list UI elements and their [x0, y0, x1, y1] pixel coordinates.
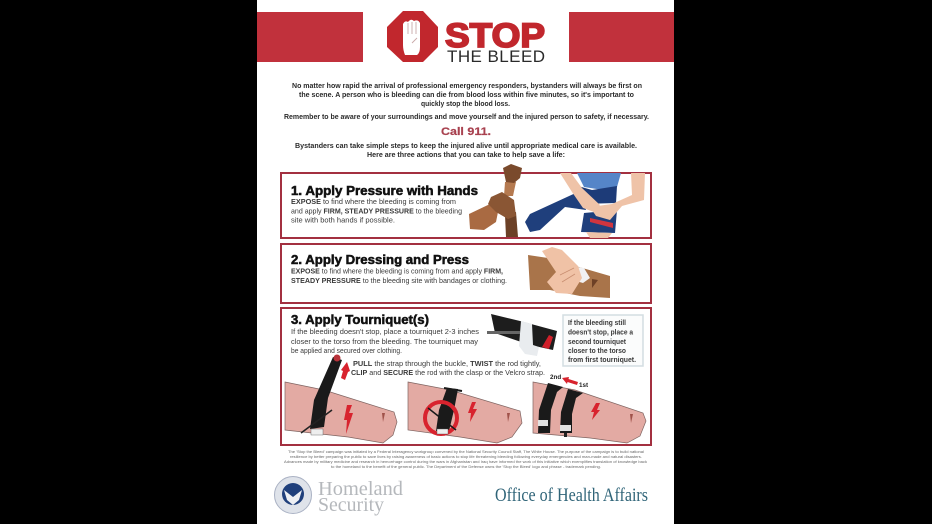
panel 3 intro text: [291, 327, 479, 355]
heading 1: 1. Apply Pressure with Hands: [291, 183, 478, 198]
callout: second tourniquet: second tourniquet: [568, 337, 627, 346]
panel 3 intro text: closer to the torso from the bleeding. The tourniquet may: [291, 337, 478, 346]
panel 1 body text: and apply FIRM, STEADY PRESSURE to the bleeding: [291, 206, 462, 216]
callout: second tourniquet: doesn't stop, place a: [568, 328, 634, 336]
homeland security logo: [274, 476, 403, 516]
wordmark: Homeland Security: Homeland: [318, 478, 403, 500]
callout: second tourniquet: [563, 315, 643, 366]
panel 1 body text: site with both hands if possible.: [291, 216, 395, 224]
panel 3 intro text: be applied and secured over clothing.: [291, 346, 402, 355]
instruction text: CLIP and SECURE the rod with the clasp or the Velcro strap.: [351, 368, 545, 377]
heading 2: 2. Apply Dressing and Press: [291, 252, 469, 267]
logo word STOP: STOP: [445, 17, 545, 55]
arrow: pull up: [341, 362, 350, 380]
logo: Stop the Bleed: [387, 11, 545, 66]
intro paragraph: [292, 81, 642, 108]
disclaimer text: [284, 450, 647, 469]
labels: 2nd and 1st with arrow: 2nd: [550, 374, 561, 381]
call 911: Call 911.: [441, 126, 491, 138]
bystander text: Here are three actions that you can take to help save a life:: [367, 150, 565, 159]
panel 1 body text: EXPOSE to find where the bleeding is coming from: [291, 197, 456, 206]
panel 3: apply tourniquet: [281, 308, 651, 445]
labels: 2nd and 1st with arrow: [550, 374, 589, 389]
white poster page: [257, 0, 674, 524]
panel 3 border: [281, 308, 651, 445]
intro paragraph: No matter how rapid the arrival of professional emergency responders, bystanders will always be first on: [292, 81, 642, 90]
callout: second tourniquet: If the bleeding still: [568, 318, 626, 327]
wordmark: Homeland Security: [318, 478, 403, 516]
office of health affairs: Office of Health Affairs: [495, 485, 648, 506]
panel 2: apply dressing: [281, 244, 651, 303]
callout: second tourniquet: closer to the torso: [568, 346, 627, 355]
panel 3 intro text: If the bleeding doesn't stop, place a tourniquet 2-3 inches: [291, 327, 479, 336]
labels: 2nd and 1st with arrow: 1st: [579, 382, 589, 389]
panel 1: apply pressure: [281, 164, 651, 238]
illustration: tourniquet package: [487, 314, 557, 356]
illustration: hands pressing dressing on arm: [528, 247, 610, 298]
heading 3: 3. Apply Tourniquet(s): [291, 312, 429, 327]
instruction text: [351, 359, 545, 377]
illustration: hands gripping arm: [469, 164, 522, 237]
bystander text: [295, 141, 637, 159]
right red banner: [569, 12, 674, 62]
instruction text: PULL the strap through the buckle, TWIST the rod tightly,: [353, 359, 541, 368]
disclaimer text: The 'Stop the Bleed' campaign was initiated by a Federal Interagency workgroup convened by the National Security Council Staff, The White House. The purpose of the campaign is to build national: [288, 450, 644, 454]
bystander text: Bystanders can take simple steps to keep the injured alive until appropriate medical care is available.: [295, 141, 637, 150]
wordmark: Homeland Security: Security: [318, 494, 384, 516]
illustration: arm with two tourniquets: [533, 382, 646, 443]
disclaimer text: to the homeland to the benefit of the general public. The Department of the Defense owns the 'Stop the Bleed' logo and phrase - trademark pending.: [331, 465, 601, 469]
panel 1 border: [281, 173, 651, 238]
panel 2 border: [281, 244, 651, 303]
illustration: arm with tourniquet pull: [285, 354, 397, 443]
safety reminder: Remember to be aware of your surroundings and move yourself and the injured person to safety, if necessary.: [284, 112, 649, 121]
logo words THE BLEED: THE BLEED: [447, 47, 545, 66]
intro paragraph: the scene. A person who is bleeding can die from blood loss within five minutes, so it's important to: [299, 90, 635, 99]
panel 2 body text: [291, 266, 507, 285]
illustration: person pressing on thigh: [525, 173, 645, 238]
panel 2 body text: STEADY PRESSURE to the bleeding site with bandages or clothing.: [291, 276, 507, 285]
panel 2 body text: EXPOSE to find where the bleeding is coming from and apply FIRM,: [291, 266, 503, 276]
callout: second tourniquet: from first tourniquet.: [568, 355, 636, 364]
left red banner: [257, 12, 363, 62]
disclaimer text: Advances made by military medicine and research in hemorrhage control during the wars in Afghanistan and Iraq have informed the work of this initiative which exemplifies translation of knowledge back: [284, 460, 647, 464]
intro paragraph: quickly stop the blood loss.: [421, 99, 510, 108]
icon: stop sign with hand: [387, 11, 438, 62]
disclaimer text: resilience by better preparing the public to save lives by raising awareness of basic actions to stop life threatening bleeding following everyday emergencies and man-made and natural disasters.: [290, 455, 642, 459]
panel 1 body text: [291, 197, 462, 224]
icon: DHS seal: [274, 476, 312, 514]
illustration: arm with twisted rod: [408, 382, 522, 443]
